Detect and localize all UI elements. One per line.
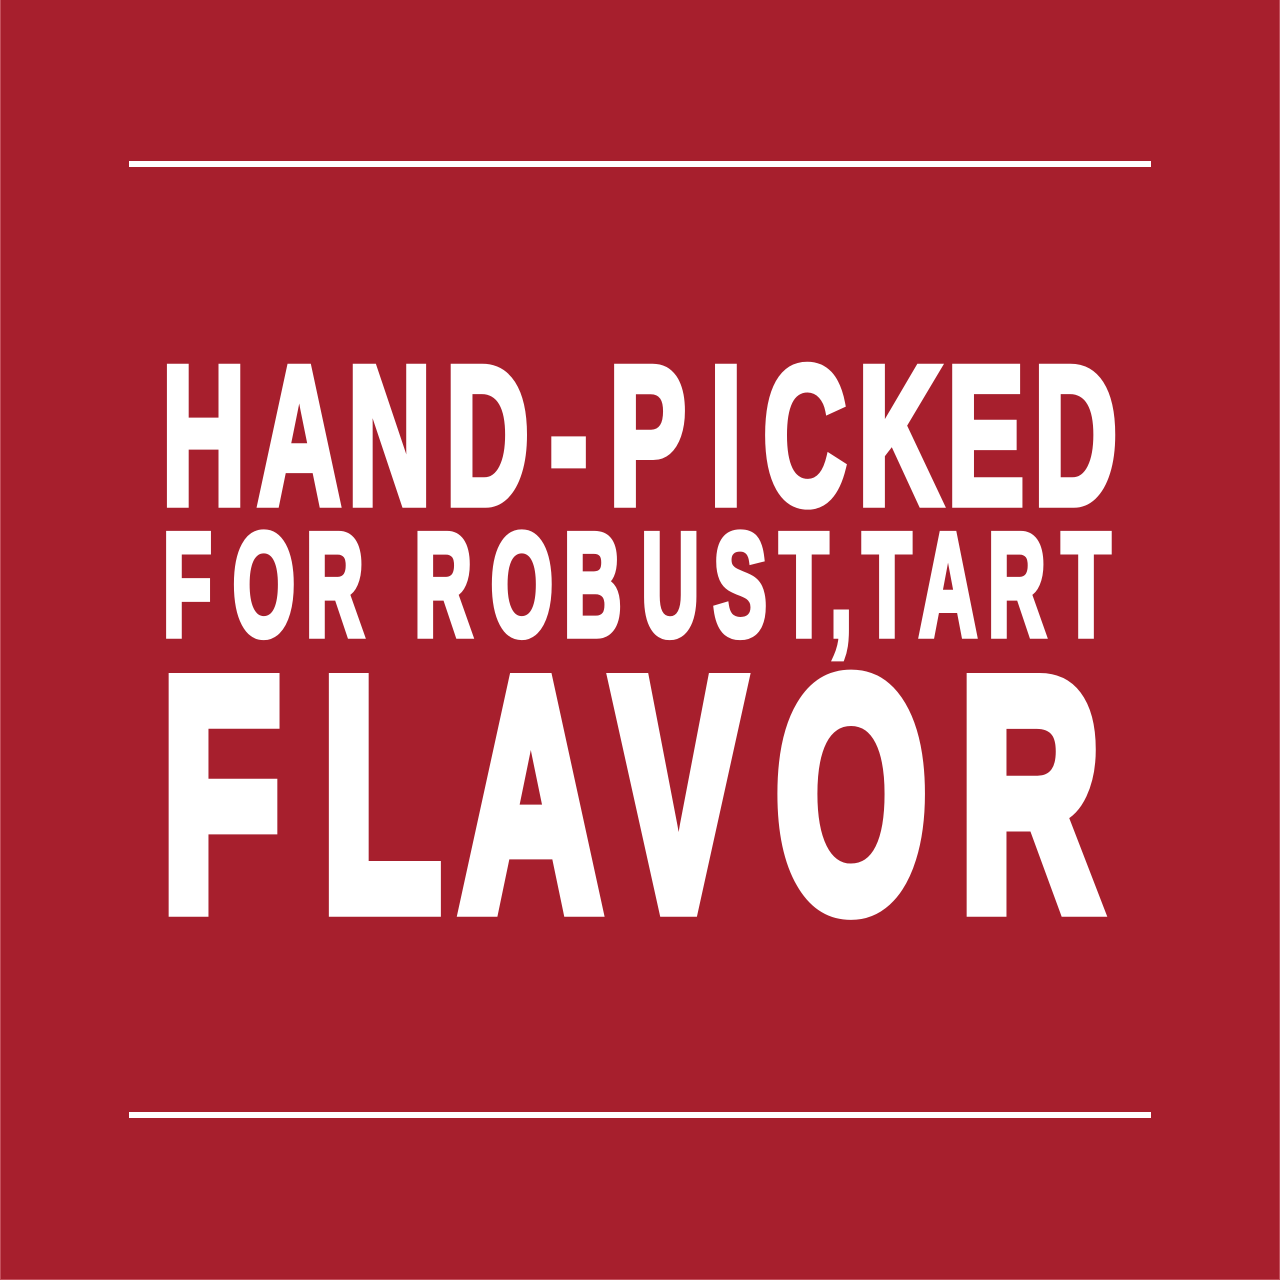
headline line 2: FOR ROBUST,TART (163, 502, 1111, 666)
top rule (129, 161, 1151, 167)
headline line 3: FLAVOR (161, 612, 1101, 976)
bottom rule (129, 1112, 1151, 1118)
headline line 1: HAND-PICKED (162, 327, 1118, 546)
